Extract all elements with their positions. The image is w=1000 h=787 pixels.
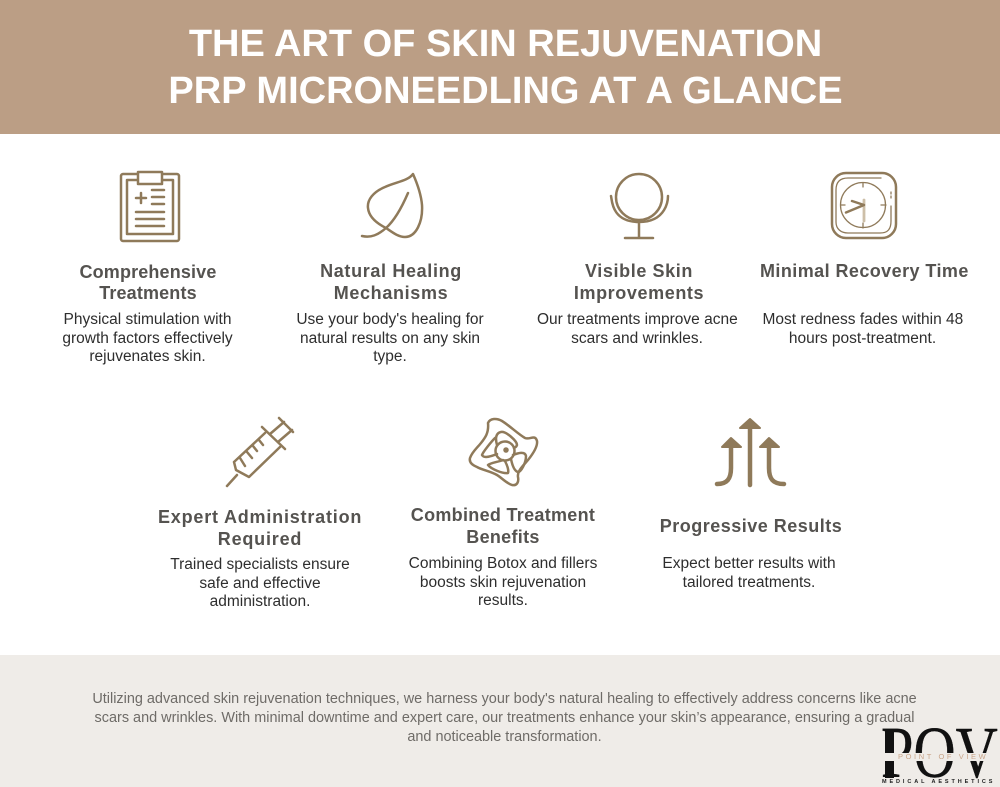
footer text <box>92 691 917 745</box>
item 1 heading: Comprehensive <box>80 262 216 282</box>
footer panel <box>0 655 1000 787</box>
item 1 text: Physical stimulation with <box>64 311 231 328</box>
item 3 text: Our treatments improve acne <box>537 311 738 328</box>
item 4 text: hours post-treatment. <box>789 330 936 346</box>
logo: POINT OF VIEW <box>898 752 988 761</box>
item 3 text <box>537 311 738 346</box>
icon: fan <box>468 418 538 486</box>
item 3 text: scars and wrinkles. <box>571 330 703 346</box>
item 7 heading: Progressive Results <box>660 516 842 536</box>
item 4 text <box>762 311 963 346</box>
icon: clipboard <box>120 170 180 242</box>
item 7 text: Expect better results with <box>662 555 836 572</box>
item 6 heading: Combined Treatment <box>411 505 595 525</box>
item 1 heading <box>80 262 216 302</box>
icon: three arrows up <box>714 418 786 488</box>
item 6 text <box>409 555 597 609</box>
item 6 heading <box>411 505 595 546</box>
item 5 text: administration. <box>210 593 310 610</box>
item 2 heading <box>320 261 462 302</box>
item 1 text <box>62 311 233 365</box>
item 2 text: natural results on any skin <box>300 330 480 346</box>
item 2 text: Use your body's healing for <box>296 311 484 328</box>
item 2 heading: Mechanisms <box>334 282 448 302</box>
title: THE ART OF SKIN REJUVENATION <box>189 23 822 65</box>
title <box>168 23 843 112</box>
item 6 heading: Benefits <box>466 526 540 546</box>
title: PRP MICRONEEDLING AT A GLANCE <box>168 70 843 112</box>
item 6 text: results. <box>478 592 528 609</box>
item 1 text: growth factors effectively <box>62 330 233 346</box>
item 2 text <box>296 311 484 365</box>
item 3 heading: Visible Skin <box>585 261 693 281</box>
item 5 heading: Required <box>218 528 302 548</box>
item 3 heading <box>574 261 704 303</box>
item 5 text <box>170 556 350 610</box>
item 4 heading: Minimal Recovery Time <box>760 261 969 281</box>
item 6 text: Combining Botox and fillers <box>409 555 597 572</box>
item 7 text <box>662 555 836 590</box>
item 5 heading: Expert Administration <box>158 507 362 527</box>
header band <box>0 0 1000 134</box>
item 2 text: type. <box>373 348 407 365</box>
icon: leaf <box>360 172 424 238</box>
icon: syringe <box>226 416 294 488</box>
item 6 text: boosts skin rejuvenation <box>420 574 586 590</box>
icon: mirror <box>610 172 670 240</box>
item 5 heading <box>158 507 362 549</box>
item 1 heading: Treatments <box>99 282 197 302</box>
icon: clock <box>830 172 898 240</box>
item 5 text: Trained specialists ensure <box>170 556 350 573</box>
footer text: scars and wrinkles. With minimal downtime and expert care, our treatments enhance your skin’s appearance, ensuring a gradual <box>95 710 914 726</box>
logo: MEDICAL AESTHETICS <box>882 779 995 785</box>
footer text: and noticeable transformation. <box>407 729 602 745</box>
item 7 text: tailored treatments. <box>683 574 815 590</box>
item 4 text: Most redness fades within 48 <box>762 311 963 328</box>
item 1 text: rejuvenates skin. <box>89 348 206 365</box>
item 2 heading: Natural Healing <box>320 261 462 281</box>
footer text: Utilizing advanced skin rejuvenation techniques, we harness your body's natural healing to effectively address concerns like acne <box>92 691 917 707</box>
item 5 text: safe and effective <box>199 574 321 592</box>
item 3 heading: Improvements <box>574 282 704 302</box>
